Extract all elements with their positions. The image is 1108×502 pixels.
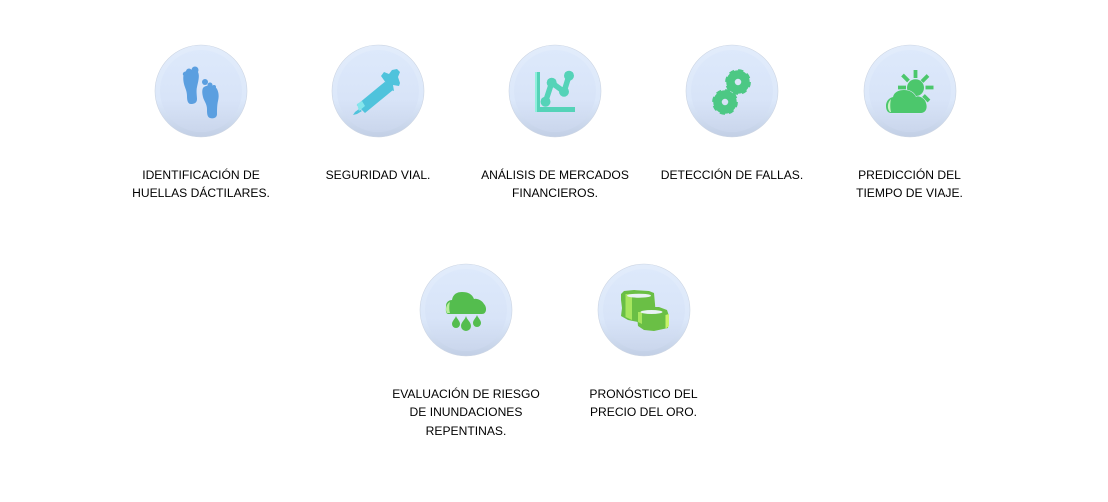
icon: gears: [686, 44, 778, 138]
label: DE INUNDACIONES: [410, 405, 522, 419]
label: IDENTIFICACIÓN DE: [142, 168, 260, 182]
icon: coin stacks: [598, 264, 690, 356]
label: SEGURIDAD VIAL.: [326, 168, 430, 182]
panel: identificación de huellas dactilares: [132, 44, 270, 200]
label: HUELLAS DÁCTILARES.: [132, 186, 270, 200]
panel: pronóstico del precio del oro: [589, 264, 698, 419]
panel: detección de fallas: [661, 44, 803, 182]
icon: rain cloud: [420, 264, 512, 356]
label: [481, 168, 629, 200]
panel: predicción del tiempo de viaje: [856, 44, 963, 200]
label: EVALUACIÓN DE RIESGO: [392, 386, 540, 400]
panel: evaluación de riesgo de inundaciones repentinas: [392, 264, 540, 438]
label: PRONÓSTICO DEL: [589, 386, 698, 400]
label: [132, 168, 270, 200]
icon: dropper: [332, 44, 424, 138]
label: [589, 386, 698, 419]
panel: seguridad vial: [326, 44, 430, 182]
label: FINANCIEROS.: [512, 186, 598, 200]
label: DETECCIÓN DE FALLAS.: [661, 168, 803, 182]
icon: sun and cloud: [864, 44, 956, 138]
icon: line chart: [508, 44, 602, 138]
label: [856, 168, 963, 200]
label: TIEMPO DE VIAJE.: [856, 186, 963, 200]
panel: análisis de mercados financieros: [481, 44, 629, 200]
label: [392, 386, 540, 438]
label: PREDICCIÓN DEL: [858, 168, 961, 182]
label: PRECIO DEL ORO.: [590, 405, 697, 419]
label: ANÁLISIS DE MERCADOS: [481, 168, 629, 182]
icon: footprints: [154, 44, 248, 138]
label: REPENTINAS.: [426, 424, 506, 438]
